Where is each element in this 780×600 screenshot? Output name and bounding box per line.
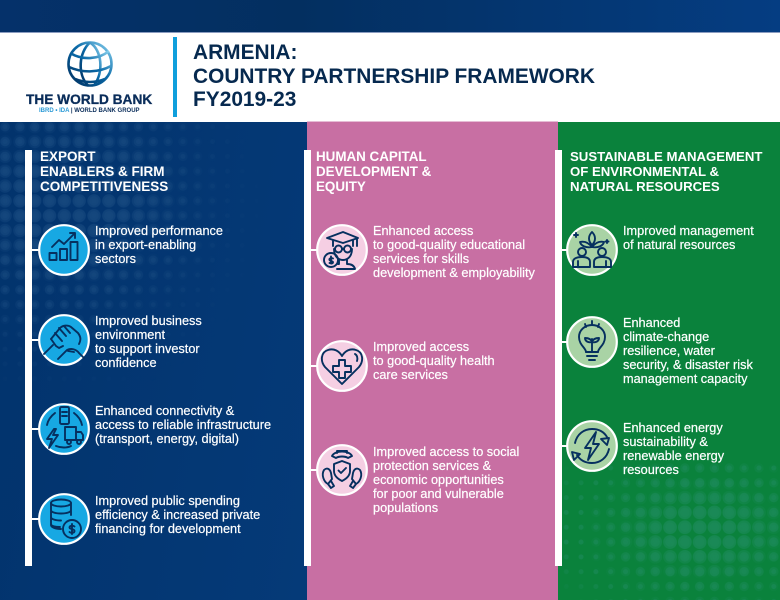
- text: sustainable 2: Enhanced: [623, 315, 680, 330]
- icon: heart with cross: [316, 340, 368, 392]
- heading: export: COMPETITIVENESS: [40, 179, 168, 194]
- text: export 1: [95, 223, 223, 266]
- text: human 1: services for skills: [373, 251, 469, 266]
- text: sustainable 2: security, & disaster risk: [623, 357, 753, 372]
- divider: [173, 37, 176, 117]
- icon: growth chart: [38, 224, 90, 276]
- column bar: human capital: [304, 150, 311, 566]
- text: export 3: access to reliable infrastructure: [95, 417, 271, 432]
- text: sustainable 2: climate-change: [623, 329, 709, 344]
- text: export 4: Improved public spending: [95, 493, 240, 508]
- text: human 3: economic opportunities: [373, 472, 504, 487]
- heading: sustainable: SUSTAINABLE MANAGEMENT: [570, 149, 762, 164]
- text: sustainable 2: [623, 315, 753, 386]
- text: sustainable 3: renewable energy: [623, 448, 724, 463]
- text: human 1: Enhanced access: [373, 223, 473, 238]
- text: human 3: [373, 444, 519, 515]
- panel: sustainable management: [558, 122, 780, 600]
- icon: coins: [38, 493, 90, 545]
- column bar: export: [25, 150, 32, 566]
- heading: sustainable: [570, 149, 762, 194]
- text: sustainable 3: resources: [623, 462, 679, 477]
- header band: [0, 33, 780, 122]
- text: sustainable 2: resilience, water: [623, 343, 715, 358]
- text: human 3: populations: [373, 500, 438, 515]
- icon: globe: [67, 41, 113, 87]
- heading: human capital: HUMAN CAPITAL: [316, 149, 427, 164]
- icon: natural resources: [566, 224, 618, 276]
- text: export 3: (transport, energy, digital): [95, 431, 239, 446]
- text: human 1: development & employability: [373, 265, 535, 280]
- text: human 1: to good-quality educational: [373, 237, 525, 252]
- text: sustainable 1: [623, 223, 754, 252]
- text: export 3: Enhanced connectivity &: [95, 403, 234, 418]
- text: sustainable 1: of natural resources: [623, 237, 735, 252]
- text: export 1: in export-enabling: [95, 237, 196, 252]
- logo subline: IBRD • IDA | WORLD BANK GROUP: [39, 108, 140, 114]
- heading: export: EXPORT: [40, 149, 96, 164]
- icon: handshake: [38, 314, 90, 366]
- text: human 2: Improved access: [373, 339, 469, 354]
- heading: sustainable: OF ENVIRONMENTAL &: [570, 164, 719, 179]
- text: sustainable 3: [623, 420, 724, 477]
- heading: human capital: [316, 149, 431, 194]
- text: human 3: Improved access to social: [373, 444, 519, 459]
- text: sustainable 2: management capacity: [623, 371, 747, 386]
- text: export 1: Improved performance: [95, 223, 223, 238]
- icon: light bulb: [566, 316, 618, 368]
- text: human 1: [373, 223, 535, 280]
- title: [193, 41, 595, 111]
- text: export 2: Improved business: [95, 313, 202, 328]
- title: FY2019-23: [193, 88, 296, 111]
- title: COUNTRY PARTNERSHIP FRAMEWORK: [193, 65, 595, 88]
- text: export 1: sectors: [95, 251, 136, 266]
- icon: graduate: [316, 224, 368, 276]
- heading: sustainable: NATURAL RESOURCES: [570, 179, 720, 194]
- text: sustainable 3: sustainability &: [623, 434, 708, 449]
- logo: World Bank: [26, 41, 152, 114]
- text: human 3: protection services &: [373, 458, 491, 473]
- text: export 2: confidence: [95, 355, 157, 370]
- text: human 2: to good-quality health: [373, 353, 495, 368]
- text: export 4: [95, 493, 260, 536]
- icon: connectivity: [38, 403, 90, 455]
- panel: export enablers: [0, 122, 307, 600]
- text: export 3: [95, 403, 271, 446]
- text: human 2: [373, 339, 495, 382]
- title: ARMENIA:: [193, 41, 297, 64]
- text: sustainable 3: Enhanced energy: [623, 420, 723, 435]
- text: sustainable 1: Improved management: [623, 223, 754, 238]
- text: export 4: efficiency & increased private: [95, 507, 260, 522]
- icon: renewable energy: [566, 420, 618, 472]
- logo wordmark: THE WORLD BANK: [26, 92, 152, 107]
- heading: export: ENABLERS & FIRM: [40, 164, 164, 179]
- text: human 2: care services: [373, 367, 448, 382]
- text: export 2: to support investor: [95, 341, 200, 356]
- text: export 2: [95, 313, 202, 370]
- text: export 4: financing for development: [95, 521, 241, 536]
- text: export 2: environment: [95, 327, 165, 342]
- heading: human capital: EQUITY: [316, 179, 366, 194]
- heading: export: [40, 149, 168, 194]
- top band: [0, 0, 780, 33]
- heading: human capital: DEVELOPMENT &: [316, 164, 431, 179]
- icon: social protection: [316, 444, 368, 496]
- text: human 3: for poor and vulnerable: [373, 486, 504, 501]
- column bar: sustainable: [555, 150, 562, 566]
- panel: human capital: [307, 121, 558, 600]
